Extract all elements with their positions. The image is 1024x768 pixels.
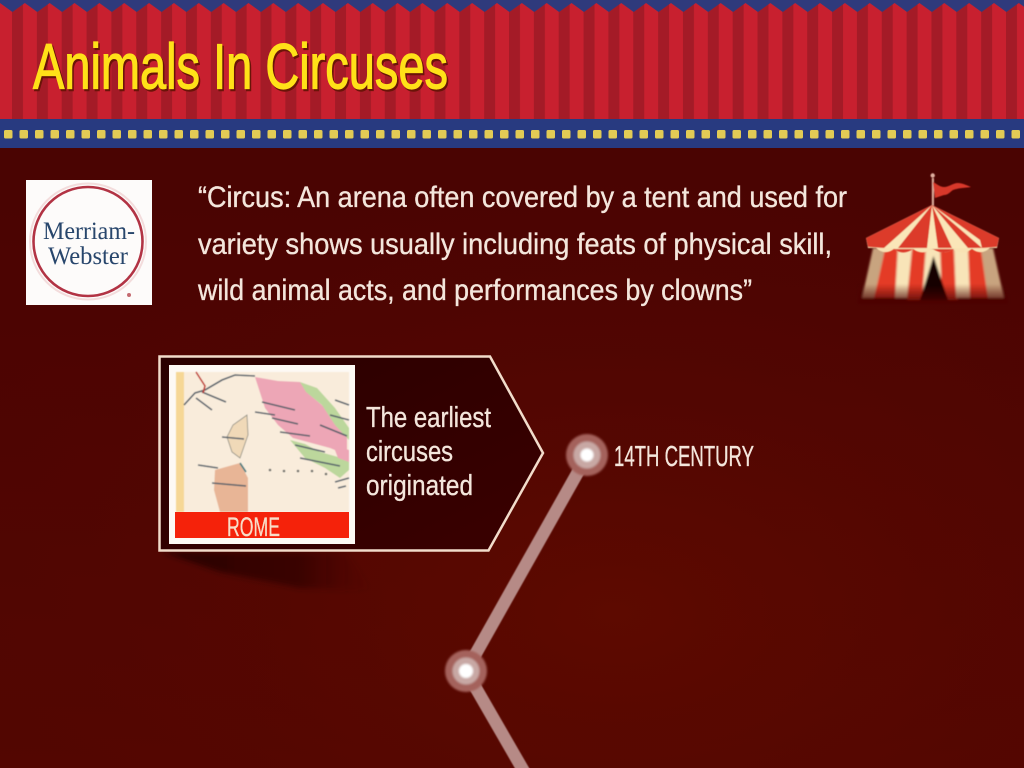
tent roof (866, 205, 999, 252)
timeline node: lower (445, 650, 487, 692)
card text: The earliest (366, 402, 491, 434)
scalloped top edge (0, 0, 1024, 14)
definition quote (197, 181, 847, 307)
card text: circuses (366, 436, 453, 468)
Merriam-Webster logo (26, 180, 152, 305)
card shadow (162, 552, 372, 590)
title: Animals In Circuses (34, 32, 450, 104)
definition quote: variety shows usually including feats of physical skill, (198, 228, 832, 261)
curtain stripes (0, 0, 1024, 120)
flag and pole (930, 173, 971, 206)
map photo: ROME (227, 512, 280, 542)
card outline (160, 356, 543, 550)
title: Animals In Circuses (33, 30, 448, 102)
Merriam-Webster logo: Merriam- (43, 218, 135, 245)
icon: circus tent (858, 173, 1008, 304)
ROME label (175, 512, 349, 538)
map photo (169, 365, 355, 544)
card text: originated (366, 470, 473, 502)
tent door (920, 256, 948, 300)
timeline path (466, 456, 587, 768)
valance (876, 248, 990, 252)
card text (366, 402, 491, 502)
panel: Rome origin card (160, 356, 543, 550)
header banner (0, 0, 1024, 148)
definition quote: “Circus: An arena often covered by a tent and used for (198, 181, 847, 214)
label: 14th century: 14TH CENTURY (614, 441, 754, 473)
timeline (445, 434, 754, 768)
definition quote: wild animal acts, and performances by clowns” (197, 274, 752, 307)
tent walls (858, 248, 1008, 304)
blue dotted band (0, 119, 1024, 148)
timeline node: 14th century (566, 434, 608, 476)
Merriam-Webster logo: Webster (48, 243, 129, 270)
